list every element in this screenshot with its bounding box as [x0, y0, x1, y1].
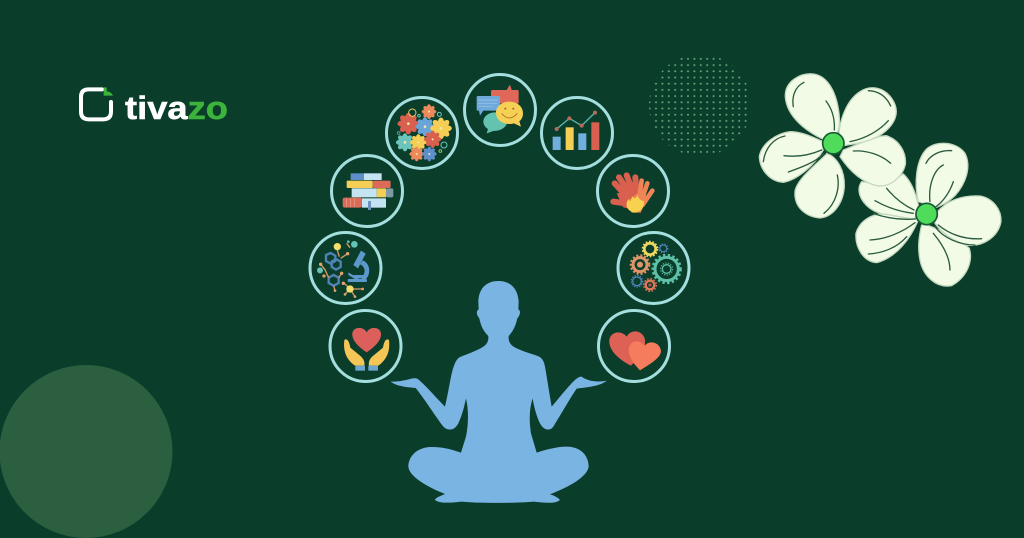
petal: left — [759, 132, 823, 182]
icon ring: books — [332, 156, 402, 226]
petal: top — [785, 74, 839, 139]
petal: lower left — [856, 214, 918, 263]
icon ring: caring hands — [330, 310, 401, 382]
icon: molecules and microscope — [317, 240, 369, 298]
icon: flower cluster — [396, 104, 452, 161]
icon ring: gears — [618, 232, 689, 304]
icon: hands holding heart — [344, 328, 389, 371]
dotted circle — [649, 54, 751, 156]
icon ring: chart — [542, 98, 612, 168]
petal: right upper — [839, 88, 896, 146]
petal: upper left — [859, 174, 918, 219]
flower 2 — [856, 143, 1001, 286]
icon: bar chart with trend line — [553, 111, 599, 150]
logo icon — [81, 87, 113, 119]
decorative circle bottom left — [0, 365, 172, 538]
petal: bottom — [919, 225, 970, 286]
icon ring: hearts — [598, 310, 670, 382]
icon ring: speech bubbles — [464, 74, 536, 146]
petal: right lower — [840, 136, 905, 186]
petal veins — [763, 82, 891, 213]
meditating figure — [391, 281, 607, 503]
petal veins — [868, 151, 982, 270]
petal: bottom — [795, 153, 844, 218]
icon: speech bubbles with smiley — [477, 85, 523, 133]
flower center — [823, 133, 844, 154]
petal: top — [916, 143, 968, 207]
petal: right — [935, 196, 1001, 245]
icon ring: hands — [598, 156, 668, 226]
flower 1 — [759, 74, 905, 218]
flower center — [916, 203, 937, 225]
icon: two hearts — [609, 331, 661, 370]
icon ring: flowers — [386, 98, 458, 168]
icon: stack of books — [343, 173, 393, 210]
icon: overlapping hands with flame — [613, 175, 652, 213]
icon ring: science — [310, 232, 381, 304]
logo: tivazo — [81, 87, 228, 126]
logo wordmark: tivazo — [125, 90, 228, 126]
icon: gears — [631, 242, 680, 291]
